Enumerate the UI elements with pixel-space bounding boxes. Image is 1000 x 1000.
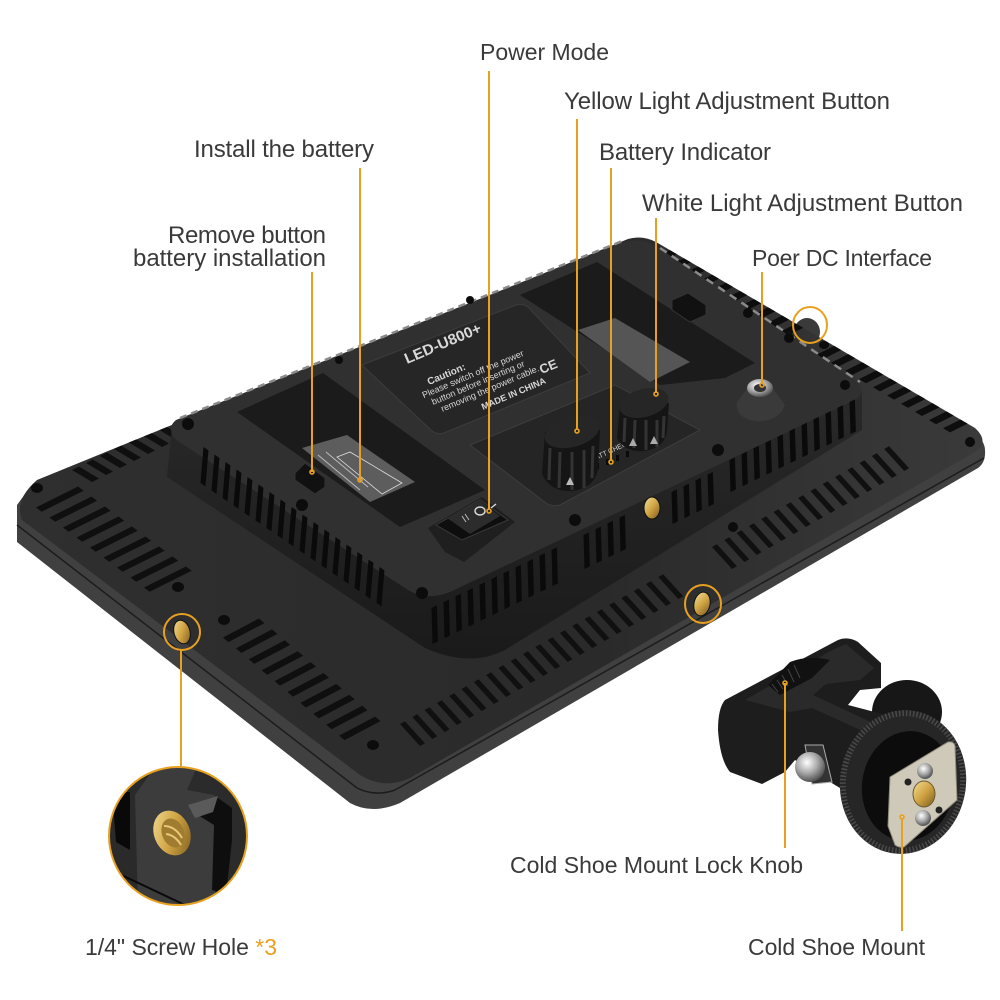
DC power interface [737,379,785,421]
label: lock knob: Cold Shoe Mount Lock Knob [510,852,803,878]
knob plate [470,385,700,506]
mount highlight [745,644,905,748]
yellow light knob [541,410,603,491]
right recess tab [672,293,706,322]
magnified screw hole [108,766,248,906]
label: battery indicator: Battery Indicator [599,139,771,166]
leader lines [181,71,904,931]
DC port bump [794,318,820,346]
label: install the battery: Install the battery [194,136,374,163]
block side wall [167,392,862,659]
label: remove button: battery installation [133,245,326,272]
label: power mode: Power Mode [480,39,609,65]
knurled ring [831,702,975,862]
cold shoe mount [718,638,975,862]
label: DC interface: Poer DC Interface [752,245,932,271]
label: yellow light button: Yellow Light Adjustment Button [564,88,890,115]
mount body [718,638,905,800]
label: remove button: Remove button [168,222,326,249]
power rocker switch [428,497,515,562]
right battery label [578,318,690,382]
panel top face [20,238,982,783]
callout ring: left screw [164,614,200,650]
metal plate [888,742,957,847]
label: cold shoe mount: Cold Shoe Mount [748,934,926,960]
caution text: Caution: [426,362,467,388]
back collar [872,680,942,744]
caution text [402,298,563,432]
lock knob [768,658,830,695]
label: remove button [133,222,326,272]
panel edge fins [57,254,966,737]
label: screw hole: 1/4" Screw Hole *3 [85,934,277,960]
callout ring: bottom screw [685,585,721,623]
caution text: LED-U800+ [402,320,484,368]
label: white light button: White Light Adjustment Button [642,190,963,217]
left battery recess [237,373,485,527]
block top surface [171,241,862,596]
brass screw hole bottom edge [692,591,712,617]
caution text: CE [537,356,560,377]
LED panel [17,238,985,809]
caution plate [362,298,590,434]
left battery label [302,435,415,502]
silver bolt [795,745,832,784]
right battery recess [520,262,755,385]
panel side wall [17,240,985,809]
plate markings: BATT CHECK [590,439,633,464]
caution text: button before inserting or [430,359,526,407]
caution text: Please switch off the power [421,348,525,400]
raised rear block [167,240,862,659]
caution text: MADE IN CHINA [480,375,548,412]
brass screw hole rear block [644,497,660,519]
block side fins [202,412,862,626]
mounting holes [31,341,975,750]
white light knob [616,383,672,451]
remove button [295,463,325,494]
caution text: removing the power cable. [439,363,541,414]
brass screw hole left edge [171,618,193,646]
callout ring: DC side [793,307,827,343]
block holes [182,296,850,599]
top edge highlights [180,240,860,418]
